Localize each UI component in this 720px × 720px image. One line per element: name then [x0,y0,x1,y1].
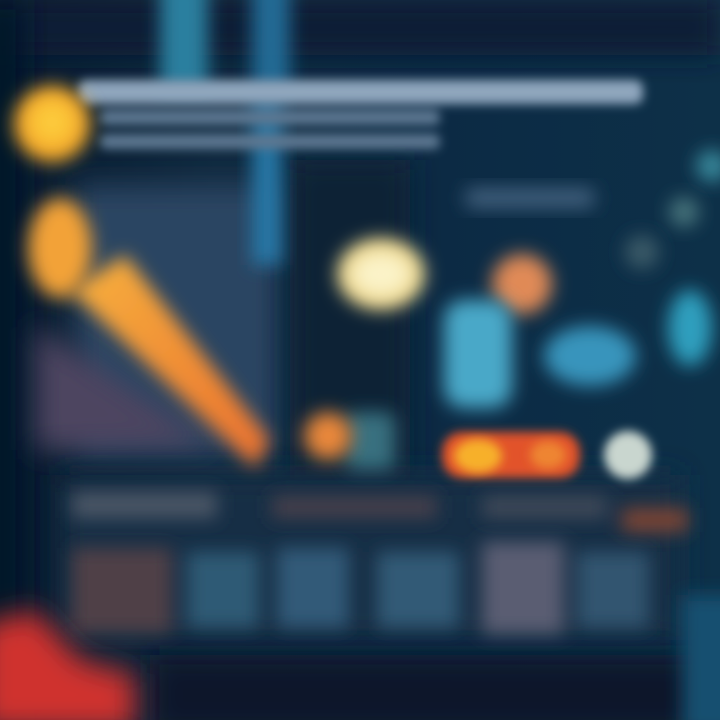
right side floating circles [625,150,720,366]
vertical light beams [160,0,290,265]
lower table columns [72,542,649,634]
lower table header row [72,492,688,532]
subheading text [465,188,595,208]
orange yellow pill [442,432,580,478]
person figure [444,254,636,408]
glowing speech bubble [337,238,425,310]
orange diagonal arrow [28,198,270,468]
white circle [604,431,652,479]
title text block [78,80,643,149]
orange dot and teal block [304,412,395,470]
blue bottom right block [682,595,720,720]
red corner shape [0,610,135,720]
icon: yellow circle [14,86,90,162]
